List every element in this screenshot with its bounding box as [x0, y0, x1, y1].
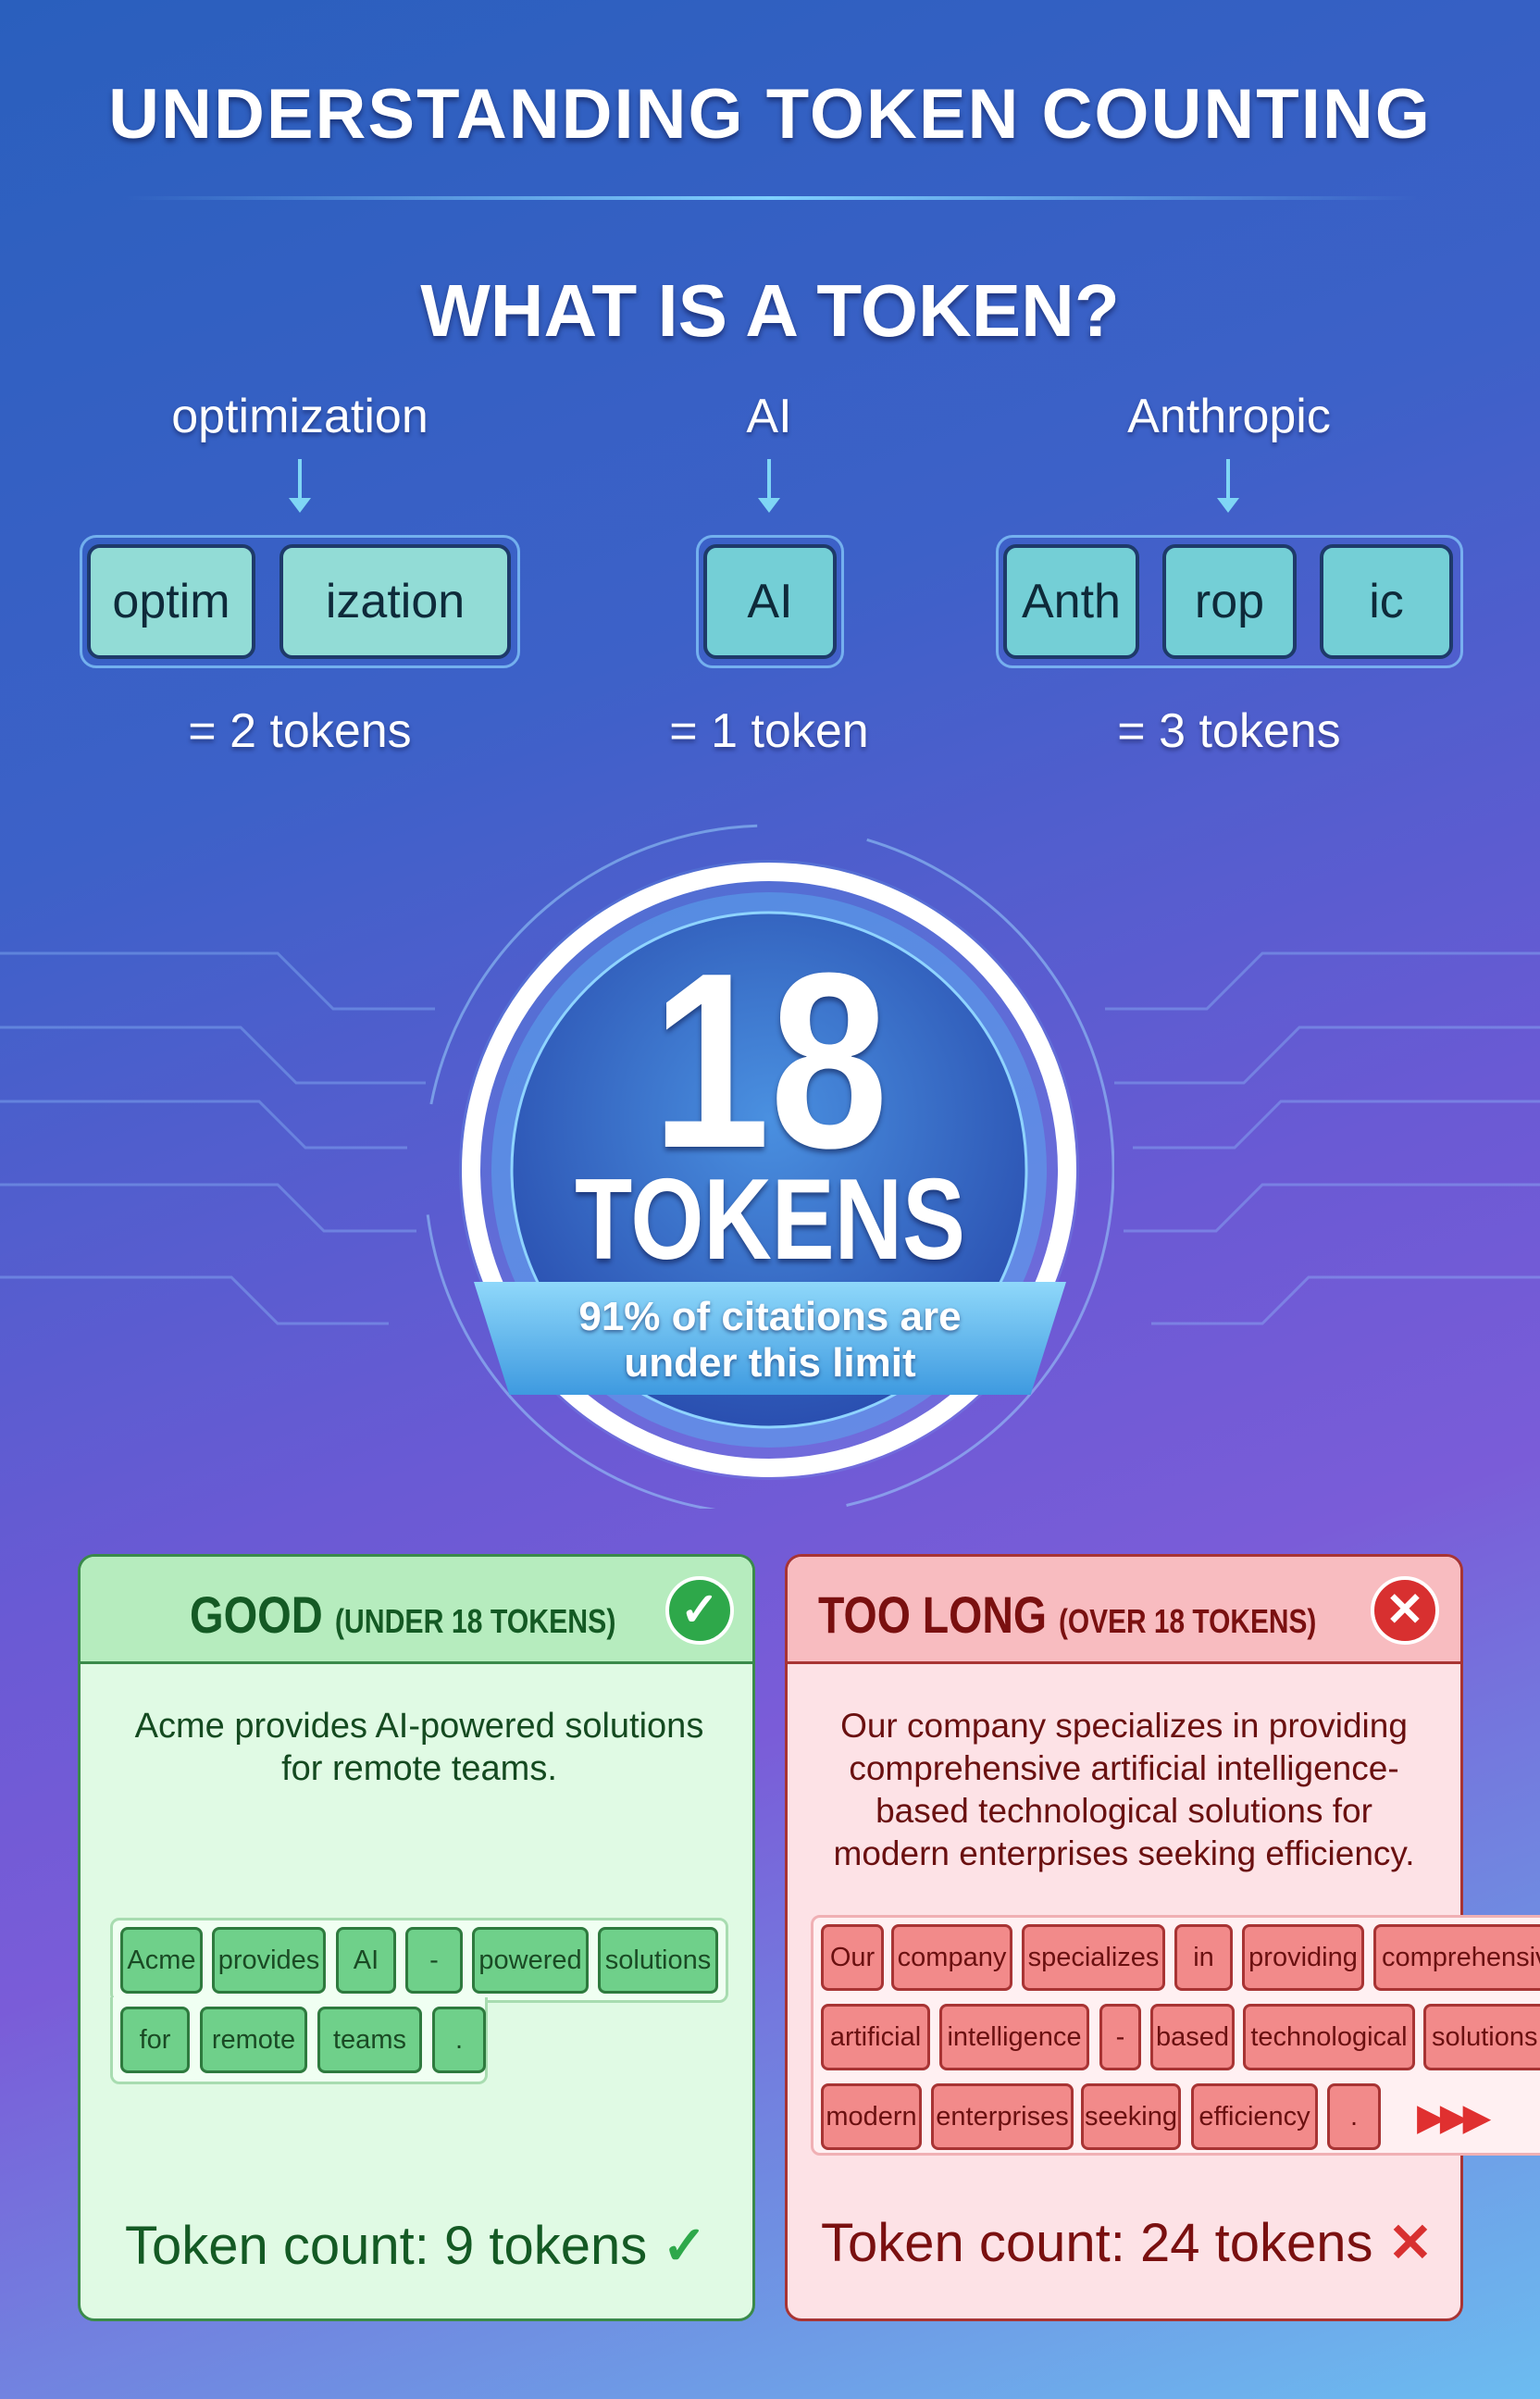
example: Anthropic: = 3 tokens: [1117, 704, 1341, 758]
token chips good: remote: [212, 2025, 295, 2055]
example: Anthropic: rop: [1195, 575, 1264, 628]
decorative circuit lines: [0, 951, 1540, 1325]
token chips long: technological: [1250, 2021, 1408, 2051]
token chips long: intelligence: [947, 2021, 1082, 2051]
text: long sentence: based technological solutions for: [876, 1792, 1372, 1830]
token chips good: for: [140, 2025, 170, 2055]
panel: good: [78, 1554, 755, 2321]
token chips good: .: [455, 2025, 463, 2055]
badge: 18 tokens: [426, 824, 1114, 1509]
arrows: overflow: ▶▶▶: [1417, 2097, 1485, 2138]
badge: 18 tokens: 91% of citations are: [578, 1294, 962, 1339]
example: optimization: ization: [326, 575, 465, 628]
text: good sentence: Acme provides AI-powered solutions: [135, 1707, 703, 1746]
token chips long: based: [1156, 2021, 1229, 2051]
example: optimization: optim: [112, 575, 230, 628]
header: good: [81, 1557, 758, 1664]
token chips good: AI: [354, 1945, 379, 1975]
text: long sentence: comprehensive artificial intelligence-: [849, 1749, 1399, 1787]
header: too long: TOO LONG (OVER 18 TOKENS): [818, 1585, 1316, 1644]
header: too long: ✕: [1385, 1584, 1424, 1635]
example: AI: AI: [746, 390, 792, 443]
token chips good: provides: [218, 1945, 319, 1975]
token count long: Token count: 24 tokens ✕: [821, 2213, 1433, 2273]
example: Anthropic: [996, 390, 1463, 758]
example: optimization: = 2 tokens: [188, 704, 412, 758]
token chips long: enterprises: [936, 2101, 1069, 2131]
example: optimization: optimization: [171, 390, 428, 443]
badge: 18 tokens: under this limit: [624, 1340, 916, 1386]
token chips long: solutions: [1432, 2021, 1537, 2051]
banner: [474, 1282, 1066, 1395]
title: UNDERSTANDING TOKEN COUNTING: [108, 75, 1432, 154]
example: Anthropic: Anth: [1022, 575, 1121, 628]
example: AI: [669, 390, 869, 758]
example: AI: = 1 token: [669, 704, 869, 758]
token count good: Token count: 9 tokens ✓: [125, 2216, 707, 2276]
token chips good: Acme: [127, 1945, 196, 1975]
badge: 18 tokens: TOKENS: [575, 1156, 965, 1284]
token chips long: company: [898, 1942, 1006, 1971]
example: Anthropic: Anthropic: [1127, 390, 1331, 443]
token chips long: in: [1193, 1942, 1214, 1971]
token chips good: teams: [333, 2025, 406, 2055]
token chips long: [811, 1915, 1540, 2156]
token chips good: -: [429, 1945, 439, 1975]
token chips long: specializes: [1028, 1942, 1159, 1971]
example: Anthropic: ic: [1369, 575, 1404, 628]
panel: too long: [785, 1554, 1463, 2321]
token chips good: powered: [478, 1945, 582, 1975]
heading: what is a token: WHAT IS A TOKEN?: [420, 269, 1120, 352]
example: AI: AI: [747, 575, 793, 628]
token chips long: Our: [830, 1942, 875, 1971]
token chips long: providing: [1248, 1942, 1358, 1971]
token chips good: [110, 1918, 728, 2084]
header: too long: [788, 1557, 1460, 1664]
badge: 18 tokens: 18: [652, 922, 888, 1200]
text: long sentence: [834, 1707, 1414, 1872]
token chips good: solutions: [605, 1945, 711, 1975]
token chips long: modern: [826, 2101, 917, 2131]
token chips long: -: [1116, 2021, 1124, 2051]
text: long sentence: Our company specializes in providing: [840, 1707, 1408, 1745]
token chips long: artificial: [830, 2021, 921, 2051]
text: good sentence: [135, 1707, 703, 1788]
token chips long: .: [1350, 2101, 1358, 2131]
text: long sentence: modern enterprises seeking efficiency.: [834, 1834, 1414, 1872]
token chips long: efficiency: [1198, 2101, 1310, 2131]
text: good sentence: for remote teams.: [281, 1749, 557, 1788]
example: optimization: [80, 390, 520, 758]
header: good: GOOD (UNDER 18 TOKENS): [190, 1585, 615, 1644]
token chips long: seeking: [1085, 2101, 1177, 2131]
header: good: ✓: [680, 1584, 719, 1635]
